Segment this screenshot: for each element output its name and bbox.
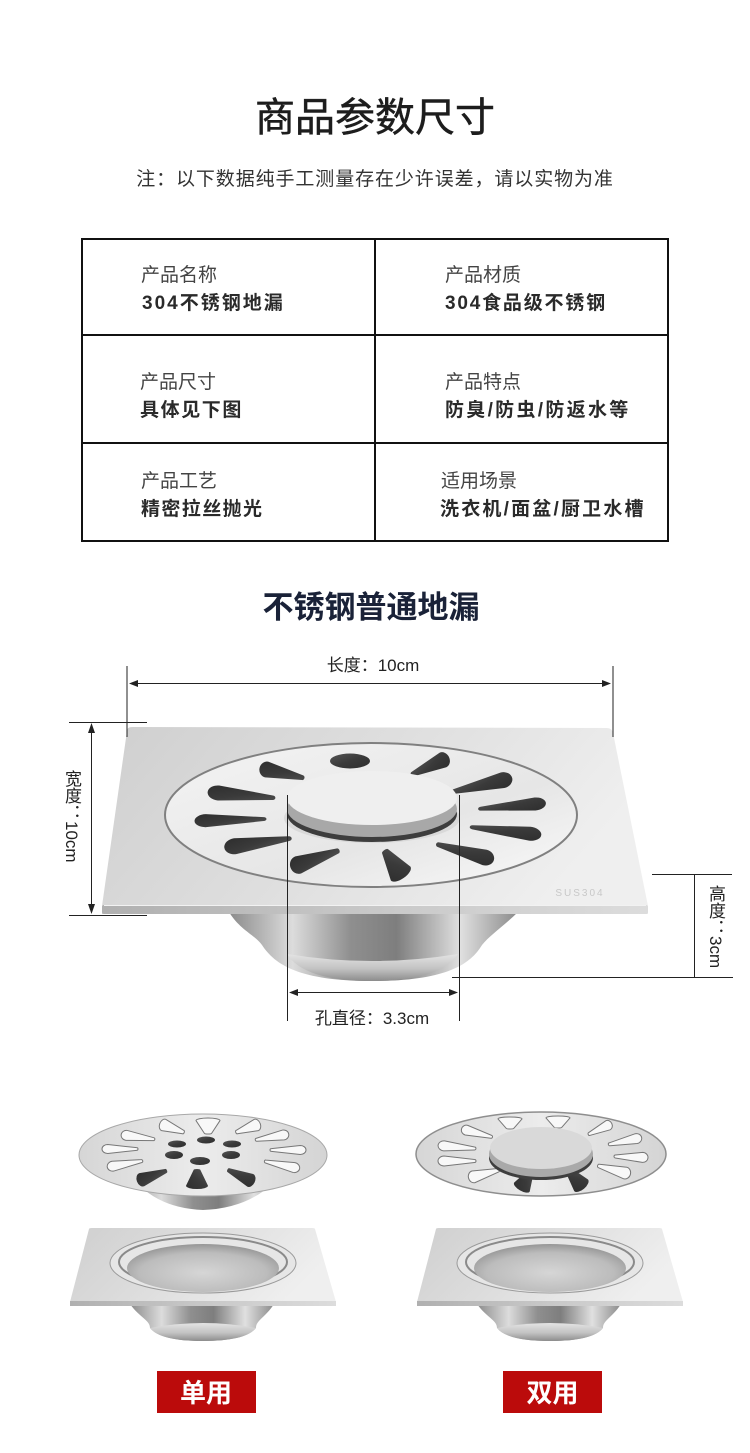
cell: usage: 适用场景 xyxy=(441,471,517,492)
cell: features: 防臭/防虫/防返水等 xyxy=(445,400,631,421)
subtitle note: 注：以下数据纯手工测量存在少许误差，请以实物为准 xyxy=(136,169,614,190)
drain bowl xyxy=(229,912,518,981)
dimension: hole diameter: 孔直径：3.3cm xyxy=(315,1009,429,1028)
perforated disc xyxy=(165,743,577,887)
cell: size: 具体见下图 xyxy=(140,400,243,421)
left cover: single use xyxy=(79,1114,327,1210)
cell: material: 304食品级不锈钢 xyxy=(445,293,607,314)
right drain base xyxy=(417,1228,683,1341)
section heading: 不锈钢普通地漏 xyxy=(262,590,480,625)
left tag xyxy=(157,1371,256,1413)
dimension: height lines xyxy=(452,874,733,978)
cell: features: 产品特点 xyxy=(445,372,521,393)
cell: features xyxy=(445,372,631,421)
cell: craft xyxy=(141,471,263,520)
centre cap xyxy=(284,771,460,843)
cell: size xyxy=(140,372,243,421)
cell: material: 产品材质 xyxy=(445,265,521,286)
cell: product name xyxy=(141,265,285,314)
right tag xyxy=(503,1371,602,1413)
cell: craft: 产品工艺 xyxy=(141,471,217,492)
title: 商品参数尺寸 xyxy=(255,96,495,140)
right tag: 双用 xyxy=(526,1378,579,1408)
height label: 高度：3cm xyxy=(706,885,725,968)
dimension: length: 长度：10cm xyxy=(327,656,419,675)
cell: usage: 洗衣机/面盆/厨卫水槽 xyxy=(440,499,646,520)
width label: 宽度：10cm xyxy=(62,770,81,863)
cell: craft: 精密拉丝抛光 xyxy=(141,499,263,520)
dimension: width lines xyxy=(69,722,147,916)
cell: product name: 304不锈钢地漏 xyxy=(142,293,285,314)
right cover: double use xyxy=(416,1112,666,1196)
dimension: hole diameter xyxy=(288,795,460,1028)
parameter table xyxy=(81,238,669,542)
cell: size: 产品尺寸 xyxy=(140,372,216,393)
cell: usage xyxy=(440,471,646,520)
drain slots xyxy=(194,750,546,885)
cell: product name: 产品名称 xyxy=(141,265,217,286)
left tag: 单用 xyxy=(180,1378,232,1408)
left drain base xyxy=(70,1228,336,1341)
logo on plate: SUS304 xyxy=(555,888,605,899)
main drain photo xyxy=(102,727,648,981)
table frame and grid xyxy=(81,238,669,542)
square plate xyxy=(102,727,648,914)
cell: material xyxy=(445,265,607,314)
dimension: length xyxy=(127,656,613,737)
